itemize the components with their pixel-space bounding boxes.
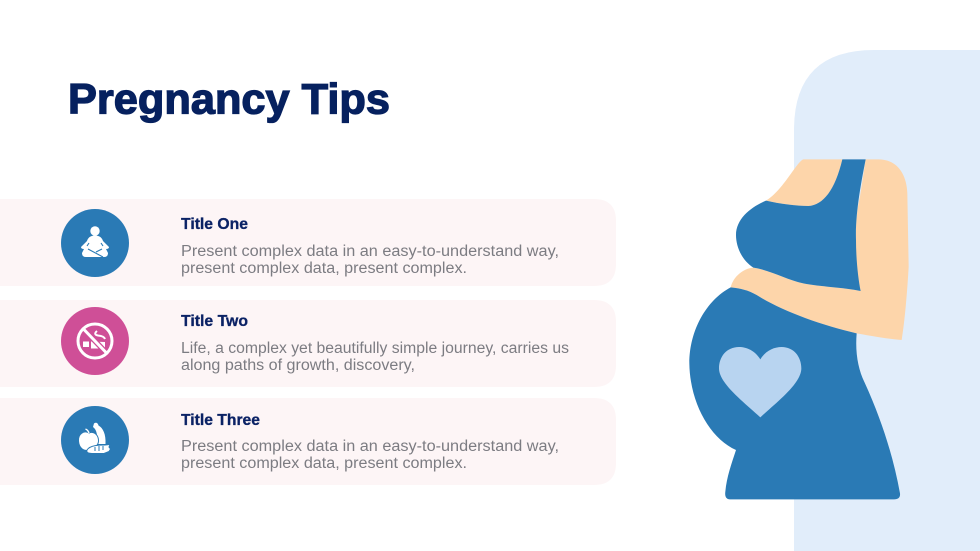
tip three text: Present complex data in an easy-to-understand way, xyxy=(181,438,559,455)
background panel xyxy=(794,50,980,551)
tip three text xyxy=(181,438,559,472)
title: Pregnancy Tips xyxy=(68,76,390,124)
icon: no smoking xyxy=(61,307,129,375)
illustration: pregnant woman xyxy=(689,159,909,499)
tip two background xyxy=(0,300,616,387)
tip two text xyxy=(181,340,569,374)
tip one text xyxy=(181,243,559,277)
tip one heading: Title One xyxy=(181,216,248,233)
tip three heading: Title Three xyxy=(181,412,260,429)
tip two text: along paths of growth, discovery, xyxy=(181,357,415,374)
tip one background xyxy=(0,199,616,286)
tip one text: Present complex data in an easy-to-understand way, xyxy=(181,243,559,260)
tip three background xyxy=(0,398,616,485)
skin: arm and hand xyxy=(731,159,909,340)
panel: tip two xyxy=(0,300,616,387)
panel: tip one xyxy=(0,199,616,286)
tip one text: present complex data, present complex. xyxy=(181,260,467,277)
panel: tip three xyxy=(0,398,616,485)
tip two text: Life, a complex yet beautifully simple journey, carries us xyxy=(181,340,569,357)
icon: heart xyxy=(719,347,801,417)
dress: top xyxy=(736,159,866,291)
icon: meditation xyxy=(61,209,129,277)
skin: neck and chest xyxy=(766,159,842,206)
dress: belly and skirt xyxy=(689,287,900,499)
tip two heading: Title Two xyxy=(181,313,248,330)
icon: fruit and vegetables xyxy=(61,406,129,474)
tip three text: present complex data, present complex. xyxy=(181,455,467,472)
